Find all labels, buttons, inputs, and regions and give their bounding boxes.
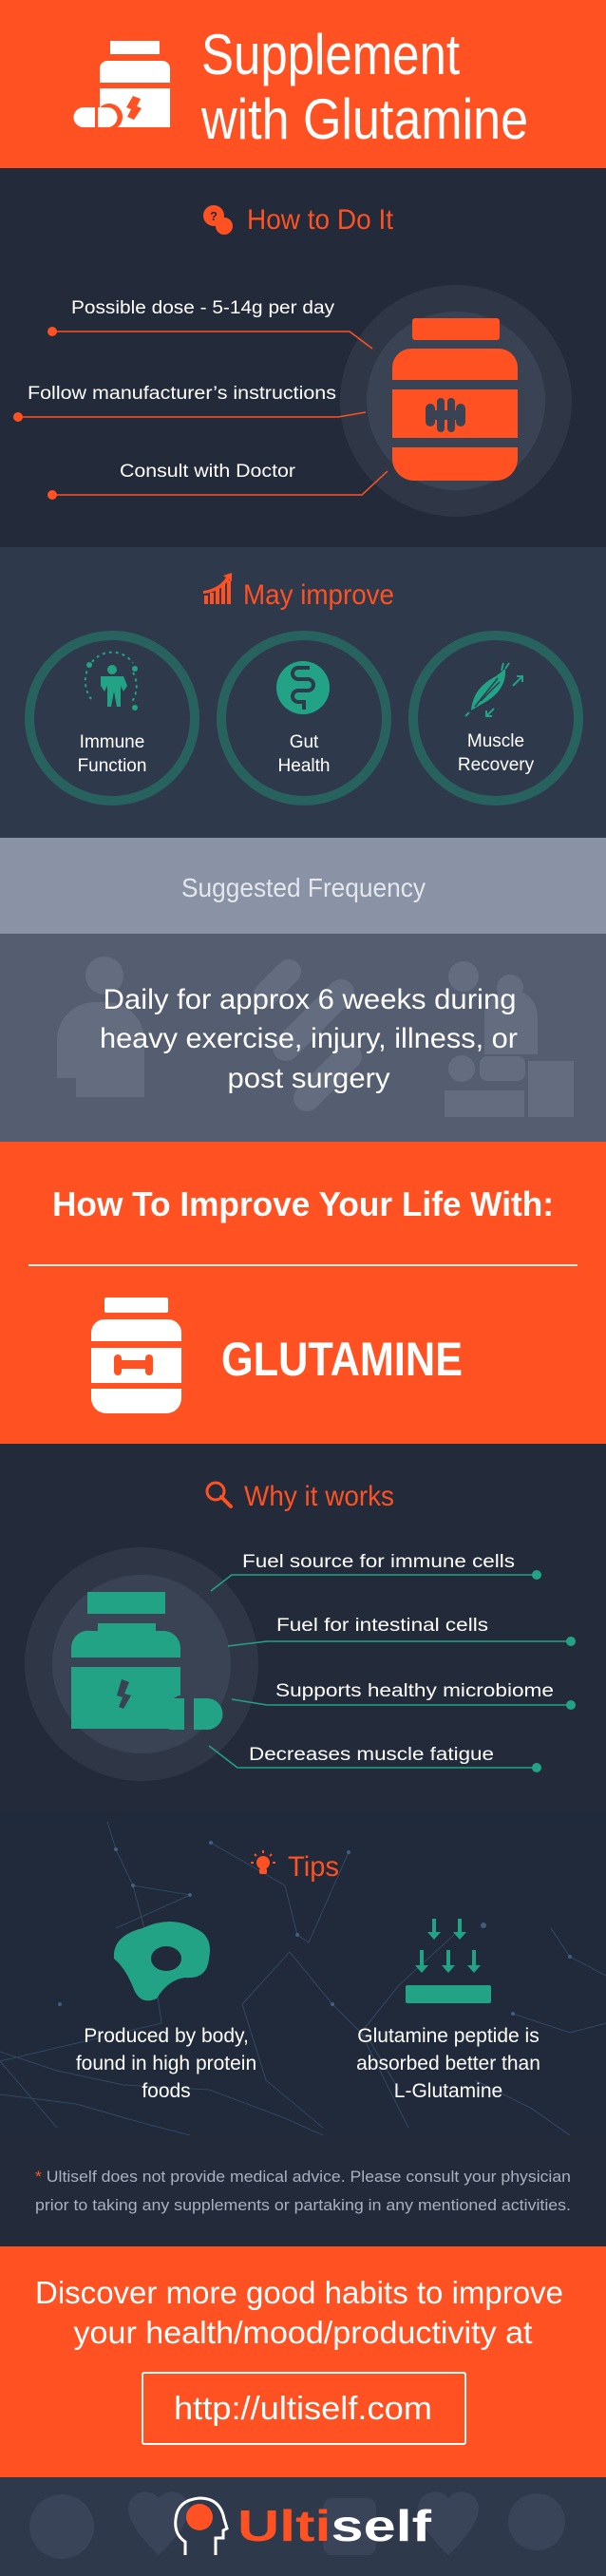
item: immune function	[29, 635, 195, 801]
heading: tips: Tips	[288, 1851, 339, 1883]
tip: produced by body	[76, 1922, 256, 2102]
item: healthy microbiome: Supports healthy microbiome	[275, 1681, 554, 1701]
panel: call to action: Discover more good habits to improve	[35, 2275, 563, 2310]
icon: supplement jar with pill	[74, 41, 170, 130]
item: possible dose	[47, 298, 372, 349]
panel: how to improve your life with glutamine: How To Improve Your Life With:	[52, 1184, 554, 1223]
panel: frequency text	[0, 934, 606, 1142]
heading: may improve: May improve	[243, 579, 394, 611]
item: follow instructions	[13, 384, 366, 422]
panel: frequency text: Daily for approx 6 weeks during	[103, 984, 517, 1015]
item: possible dose: Possible dose - 5-14g per day	[71, 298, 335, 318]
icon: teal jar with pill	[25, 1547, 258, 1781]
panel: how to do it	[0, 168, 606, 547]
link box	[142, 2373, 465, 2444]
title	[200, 23, 528, 151]
item: fuel immune cells	[211, 1552, 541, 1591]
tip: produced by body: found in high protein	[76, 2053, 256, 2074]
panel: why it works	[0, 1444, 606, 1812]
disclaimer: prior to taking any supplements or partaking in any mentioned activities.	[35, 2196, 571, 2214]
item: muscle fatigue: Decreases muscle fatigue	[249, 1745, 494, 1765]
icon: white jar	[91, 1297, 181, 1413]
title: with Glutamine	[200, 87, 528, 151]
disclaimer	[0, 2135, 606, 2246]
link box: http://ultiself.com	[174, 2391, 432, 2427]
panel: may improve	[0, 547, 606, 838]
item: fuel immune cells: Fuel source for immune cells	[242, 1552, 515, 1572]
item: gut health: Health	[278, 756, 330, 776]
item: muscle recovery: Muscle	[467, 731, 524, 751]
item: consult doctor: Consult with Doctor	[120, 462, 296, 482]
tip: glutamine peptide	[356, 1919, 540, 2102]
panel: suggested frequency heading	[0, 838, 606, 934]
tip: glutamine peptide: Glutamine peptide is	[357, 2025, 540, 2047]
decorative icons: patient, bandage, doctor	[57, 955, 574, 1117]
heading: how to do it: How to Do It	[247, 204, 394, 236]
tip: glutamine peptide: absorbed better than	[356, 2053, 540, 2074]
panel: how to improve your life with glutamine: GLUTAMINE	[221, 1333, 463, 1386]
item: fuel intestinal cells: Fuel for intestinal cells	[276, 1616, 488, 1636]
logo: ultiself: Ulti self	[237, 2501, 432, 2550]
panel: how to improve your life with glutamine	[0, 1142, 606, 1444]
item: gut health: Gut	[290, 732, 319, 752]
item: muscle recovery	[413, 635, 578, 801]
title: Supplement	[201, 23, 460, 86]
item: immune function: Function	[78, 756, 146, 776]
panel: frequency text: post surgery	[228, 1063, 389, 1094]
item: muscle recovery: Recovery	[458, 755, 535, 775]
tip: produced by body: Produced by body,	[84, 2025, 249, 2047]
panel: call to action	[0, 2246, 606, 2477]
heading: may improve	[203, 573, 394, 611]
item: fuel intestinal cells	[228, 1616, 576, 1646]
icon: jar in circle	[340, 285, 572, 517]
logo: ultiself	[176, 2498, 432, 2555]
panel: tips	[0, 1812, 606, 2135]
item: consult doctor	[47, 462, 388, 500]
item: follow instructions: Follow manufacturer’s instructions	[28, 384, 336, 404]
item: immune function: Immune	[80, 732, 144, 752]
panel: frequency text: heavy exercise, injury, illness, or	[100, 1023, 518, 1054]
header panel	[0, 0, 606, 168]
heading: how to do it: ?	[210, 209, 218, 223]
heading: tips	[251, 1850, 339, 1883]
panel: suggested frequency heading: Suggested Frequency	[181, 873, 426, 902]
disclaimer: * Ultiself does not provide medical advice. Please consult your physician	[35, 2168, 571, 2186]
heading: why it works: Why it works	[244, 1481, 394, 1512]
footer	[0, 2477, 606, 2576]
tip: glutamine peptide: L-Glutamine	[394, 2080, 502, 2102]
tip: produced by body: foods	[142, 2080, 191, 2102]
item: gut health	[221, 635, 387, 801]
item: healthy microbiome	[232, 1681, 576, 1710]
item: muscle fatigue	[209, 1745, 541, 1772]
panel: call to action: your health/mood/productivity at	[74, 2315, 532, 2350]
